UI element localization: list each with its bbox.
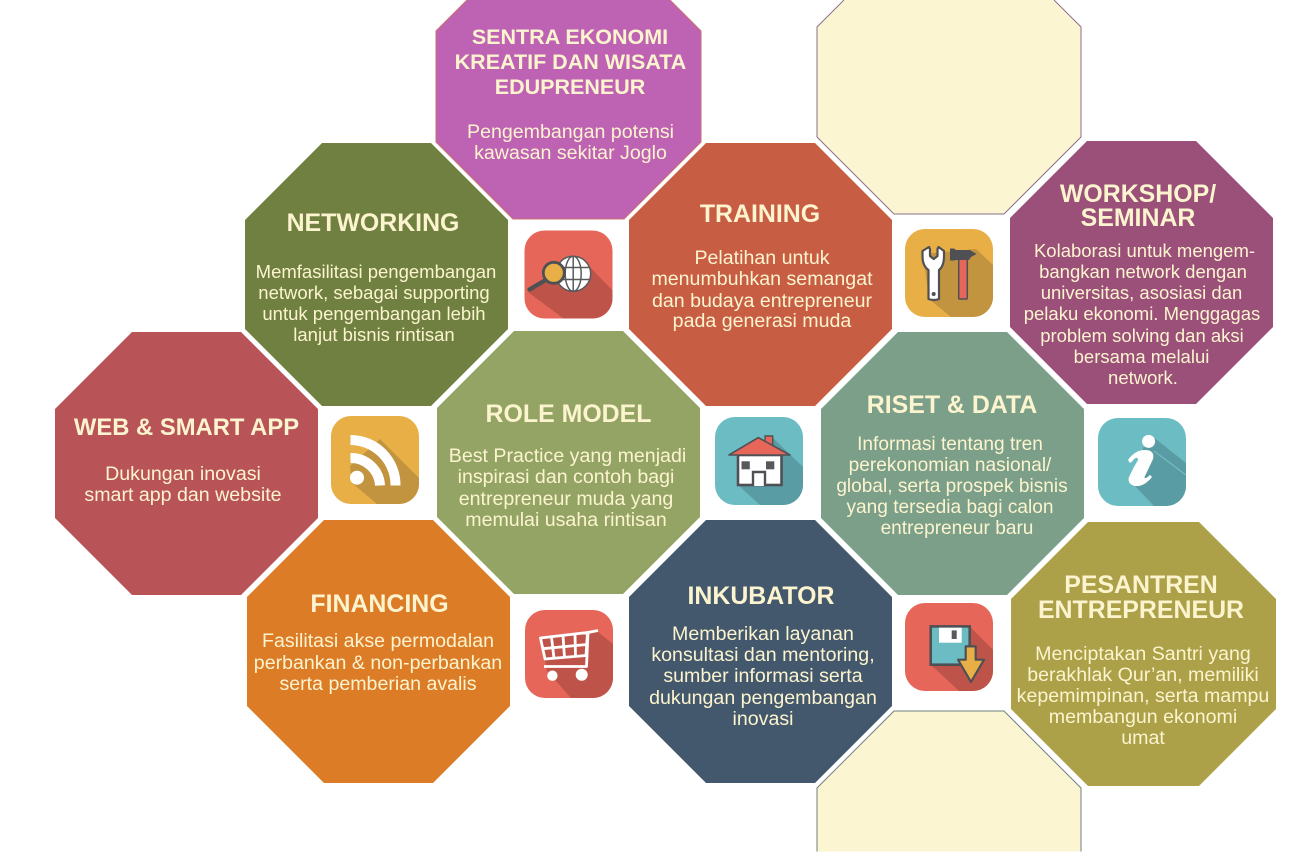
heading: Networking: NETWORKING: [287, 209, 459, 237]
text: Riset description: entrepreneur baru: [881, 518, 1033, 539]
text: Web description: [84, 463, 282, 506]
panel: Role Model: [437, 331, 700, 594]
text: Inkubator description: inovasi: [732, 708, 794, 730]
heading: Sentra Ekonomi: KREATIF DAN WISATA: [455, 50, 686, 74]
text: Pesantren description: membangun ekonomi: [1049, 706, 1237, 728]
text: Training description: menumbuhkan semangat: [651, 268, 873, 290]
text: Workshop description: universitas, asosiasi dan: [1041, 282, 1242, 303]
panel: Inkubator: [629, 520, 892, 783]
text: Sentra description: kawasan sekitar Joglo: [474, 142, 667, 164]
panel: Financing: [247, 520, 510, 783]
text: Inkubator description: sumber informasi serta: [663, 665, 863, 687]
text: Pesantren description: [1017, 643, 1269, 749]
panel: Riset & Data: [821, 332, 1084, 595]
icon: house: [715, 417, 803, 505]
text: Inkubator description: Memberikan layanan: [672, 623, 854, 645]
text: Riset description: Informasi tentang tren: [857, 434, 1043, 455]
heading: Workshop / Seminar: WORKSHOP/: [1060, 180, 1216, 208]
heading: Pesantren Entrepreneur: [1038, 571, 1244, 624]
text: Pesantren description: Menciptakan Santri yang: [1035, 643, 1251, 665]
text: Financing description: serta pemberian avalis: [279, 673, 477, 695]
heading: Sentra Ekonomi: EDUPRENEUR: [495, 75, 646, 99]
heading: Web & Smart App: WEB & SMART APP: [74, 414, 299, 441]
text: Workshop description: problem solving dan aksi: [1040, 325, 1244, 346]
text: Riset description: yang tersedia bagi calon: [846, 497, 1054, 518]
text: Networking description: [256, 261, 496, 345]
heading: Workshop / Seminar: [1060, 180, 1216, 232]
heading: Riset & Data: RISET & DATA: [867, 391, 1037, 419]
text: Pesantren description: kepemimpinan, serta mampu: [1017, 685, 1269, 707]
text: Riset description: perekonomian nasional/: [849, 455, 1052, 476]
text: Training description: pada generasi muda: [673, 310, 851, 332]
text: Role Model description: entrepreneur muda yang: [459, 488, 673, 510]
icon: shopping cart: [525, 610, 613, 698]
text: Web description: smart app dan website: [84, 484, 282, 506]
text: Workshop description: bangkan network dengan: [1039, 261, 1247, 282]
text: Workshop description: bersama melalui: [1074, 346, 1209, 367]
text: Role Model description: memulai usaha rintisan: [465, 509, 667, 531]
text: Inkubator description: dukungan pengembangan: [649, 687, 877, 709]
text: Workshop description: [1024, 240, 1260, 388]
text: Web description: Dukungan inovasi: [105, 463, 261, 485]
panel: cream octagon top: [817, 0, 1081, 214]
icon: RSS feed: [331, 416, 419, 504]
text: Inkubator description: [649, 623, 877, 730]
panel: Training: [629, 143, 892, 406]
heading: Pesantren Entrepreneur: ENTREPRENEUR: [1038, 596, 1244, 624]
text: Pesantren description: umat: [1121, 727, 1165, 749]
icon: wrench and hammer: [905, 229, 993, 317]
icon: information: [1098, 418, 1186, 506]
icon: floppy disk download: [905, 603, 993, 691]
text: Training description: Pelatihan untuk: [694, 247, 830, 269]
text: Financing description: Fasilitasi akse permodalan: [262, 630, 494, 652]
text: Role Model description: [449, 445, 686, 531]
heading: Role Model: ROLE MODEL: [486, 400, 651, 428]
text: Networking description: network, sebagai supporting: [258, 282, 490, 303]
panel: cream octagon bottom: [817, 711, 1081, 852]
heading: Financing: FINANCING: [310, 590, 449, 618]
text: Financing description: [254, 630, 502, 695]
panel: Networking: [245, 143, 508, 406]
heading: Inkubator: INKUBATOR: [687, 582, 835, 610]
text: Networking description: Memfasilitasi pengembangan: [256, 261, 496, 282]
panel: Sentra Ekonomi Kreatif: [436, 0, 701, 219]
text: Workshop description: pelaku ekonomi. Menggagas: [1024, 303, 1260, 324]
text: Role Model description: Best Practice yang menjadi: [449, 445, 686, 467]
text: Networking description: untuk pengembangan lebih: [262, 303, 486, 324]
heading: Training: TRAINING: [700, 200, 820, 228]
panel: Workshop / Seminar: [1010, 141, 1273, 404]
panel: Web & Smart App: [55, 332, 318, 595]
text: Riset description: global, serta prospek bisnis: [836, 476, 1068, 497]
panel: Pesantren Entrepreneur: [1011, 522, 1276, 786]
heading: Pesantren Entrepreneur: PESANTREN: [1064, 571, 1218, 599]
text: Inkubator description: konsultasi dan mentoring,: [651, 644, 875, 666]
text: Workshop description: network.: [1108, 367, 1178, 388]
heading: Sentra Ekonomi: [455, 25, 686, 99]
text: Workshop description: Kolaborasi untuk mengem-: [1034, 240, 1255, 261]
text: Pesantren description: berakhlak Qur’an, memiliki: [1027, 664, 1259, 686]
text: Networking description: lanjut bisnis rintisan: [293, 324, 455, 345]
heading: Sentra Ekonomi: SENTRA EKONOMI: [472, 25, 668, 49]
text: Sentra description: [467, 121, 674, 164]
text: Financing description: perbankan & non-perbankan: [254, 652, 502, 674]
heading: Workshop / Seminar: SEMINAR: [1081, 204, 1195, 232]
text: Role Model description: inspirasi dan contoh bagi: [458, 466, 674, 488]
text: Riset description: [836, 434, 1068, 539]
text: Training description: dan budaya entrepreneur: [652, 290, 873, 312]
icon: globe and magnifier: [524, 230, 612, 318]
text: Sentra description: Pengembangan potensi: [467, 121, 674, 143]
text: Training description: [651, 247, 873, 332]
